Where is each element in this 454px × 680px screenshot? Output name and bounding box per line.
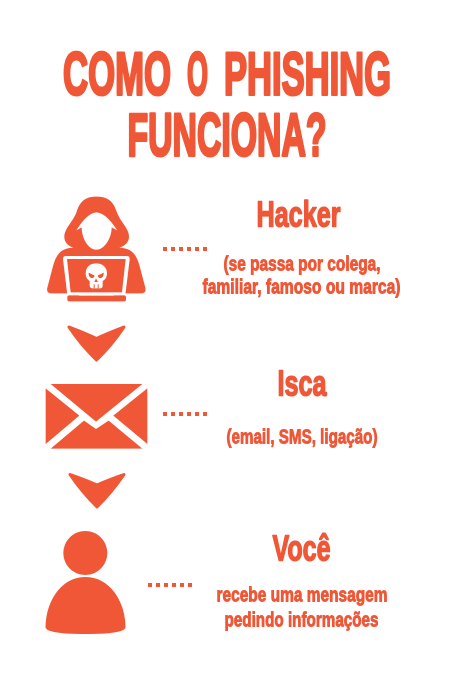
icon: envelope <box>46 384 147 449</box>
dotted connector: hacker <box>163 247 207 251</box>
title: O <box>187 40 208 108</box>
text: you description: pedindo informações <box>224 610 378 632</box>
dotted connector: you <box>148 583 192 587</box>
text: you description: recebe uma mensagem <box>216 585 388 607</box>
text: hacker description: (se passa por colega, <box>224 254 380 276</box>
heading: Hacker: Hacker <box>256 193 340 234</box>
text: hacker description: familiar, famoso ou marca) <box>202 277 400 299</box>
title <box>63 40 391 168</box>
heading: Isca: Isca <box>278 362 327 403</box>
text: hacker description <box>202 254 400 299</box>
text: you description <box>216 585 388 632</box>
heading: Você: Você <box>272 527 330 568</box>
icon: person <box>46 531 126 634</box>
icon: skull <box>86 263 107 288</box>
icon: hacker with laptop <box>47 197 146 301</box>
text: bait description: (email, SMS, ligação) <box>226 427 378 449</box>
dotted connector: bait <box>163 412 207 416</box>
arrow: hacker to bait <box>69 327 124 360</box>
arrow: bait to you <box>70 474 124 507</box>
title: COMO <box>63 40 171 108</box>
